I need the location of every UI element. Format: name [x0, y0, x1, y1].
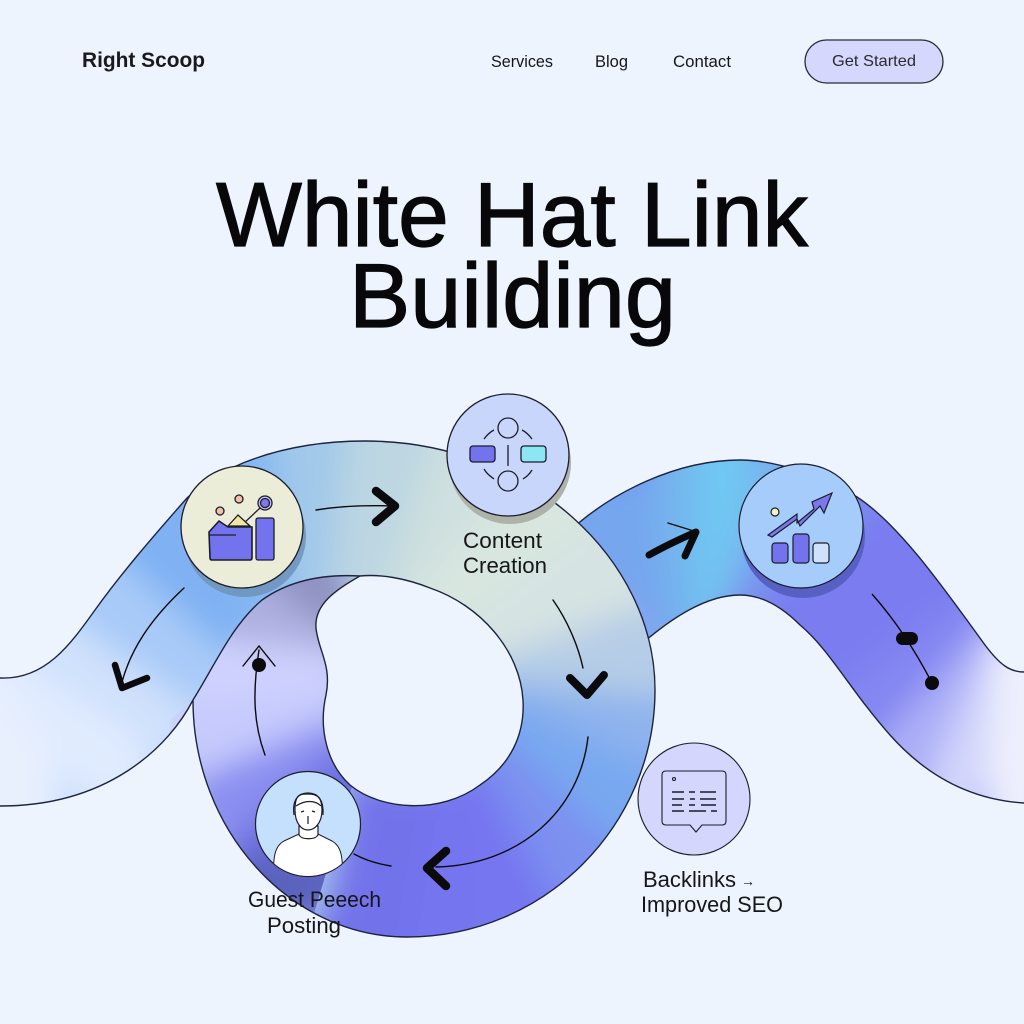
brand logo text: Right Scoop	[82, 49, 205, 72]
label: guest posting: Guest Peeech	[248, 887, 381, 912]
label: content creation	[463, 528, 547, 578]
nav link: services: Services	[491, 53, 553, 71]
icon: content strategy	[181, 466, 306, 597]
main ribbon and ring	[0, 430, 670, 950]
label: backlinks improved seo: Improved SEO	[641, 892, 783, 917]
arrow: top of ring	[316, 491, 395, 522]
label: backlinks improved seo	[641, 867, 783, 917]
arrow: bottom of ring	[354, 737, 588, 886]
arrow: right of ring	[553, 600, 604, 695]
icon: guest posting person	[256, 772, 360, 890]
right ribbon	[550, 450, 1024, 810]
arrow: right ribbon end with markers	[872, 594, 939, 690]
label: guest posting	[248, 887, 381, 938]
button: get started	[805, 40, 943, 83]
arrow: right ribbon start	[649, 523, 697, 556]
title: Building	[349, 246, 676, 347]
arrow: left of ring	[243, 646, 275, 755]
label: content creation: Content	[463, 528, 542, 553]
arrow: left ribbon	[115, 588, 184, 688]
button: get started: Get Started	[832, 53, 916, 70]
icon: content creation	[447, 394, 571, 524]
icon: backlinks document	[638, 743, 750, 855]
icon: growth chart	[739, 464, 865, 598]
navigation bar	[82, 40, 943, 83]
label: backlinks improved seo: Backlinks	[643, 867, 736, 892]
nav link: contact: Contact	[673, 53, 731, 71]
label: backlinks improved seo: →	[741, 873, 755, 889]
nav link: blog: Blog	[595, 53, 628, 71]
title: White Hat Link	[216, 165, 808, 266]
label: guest posting: Posting	[267, 913, 341, 938]
title	[216, 165, 808, 347]
label: content creation: Creation	[463, 553, 547, 578]
